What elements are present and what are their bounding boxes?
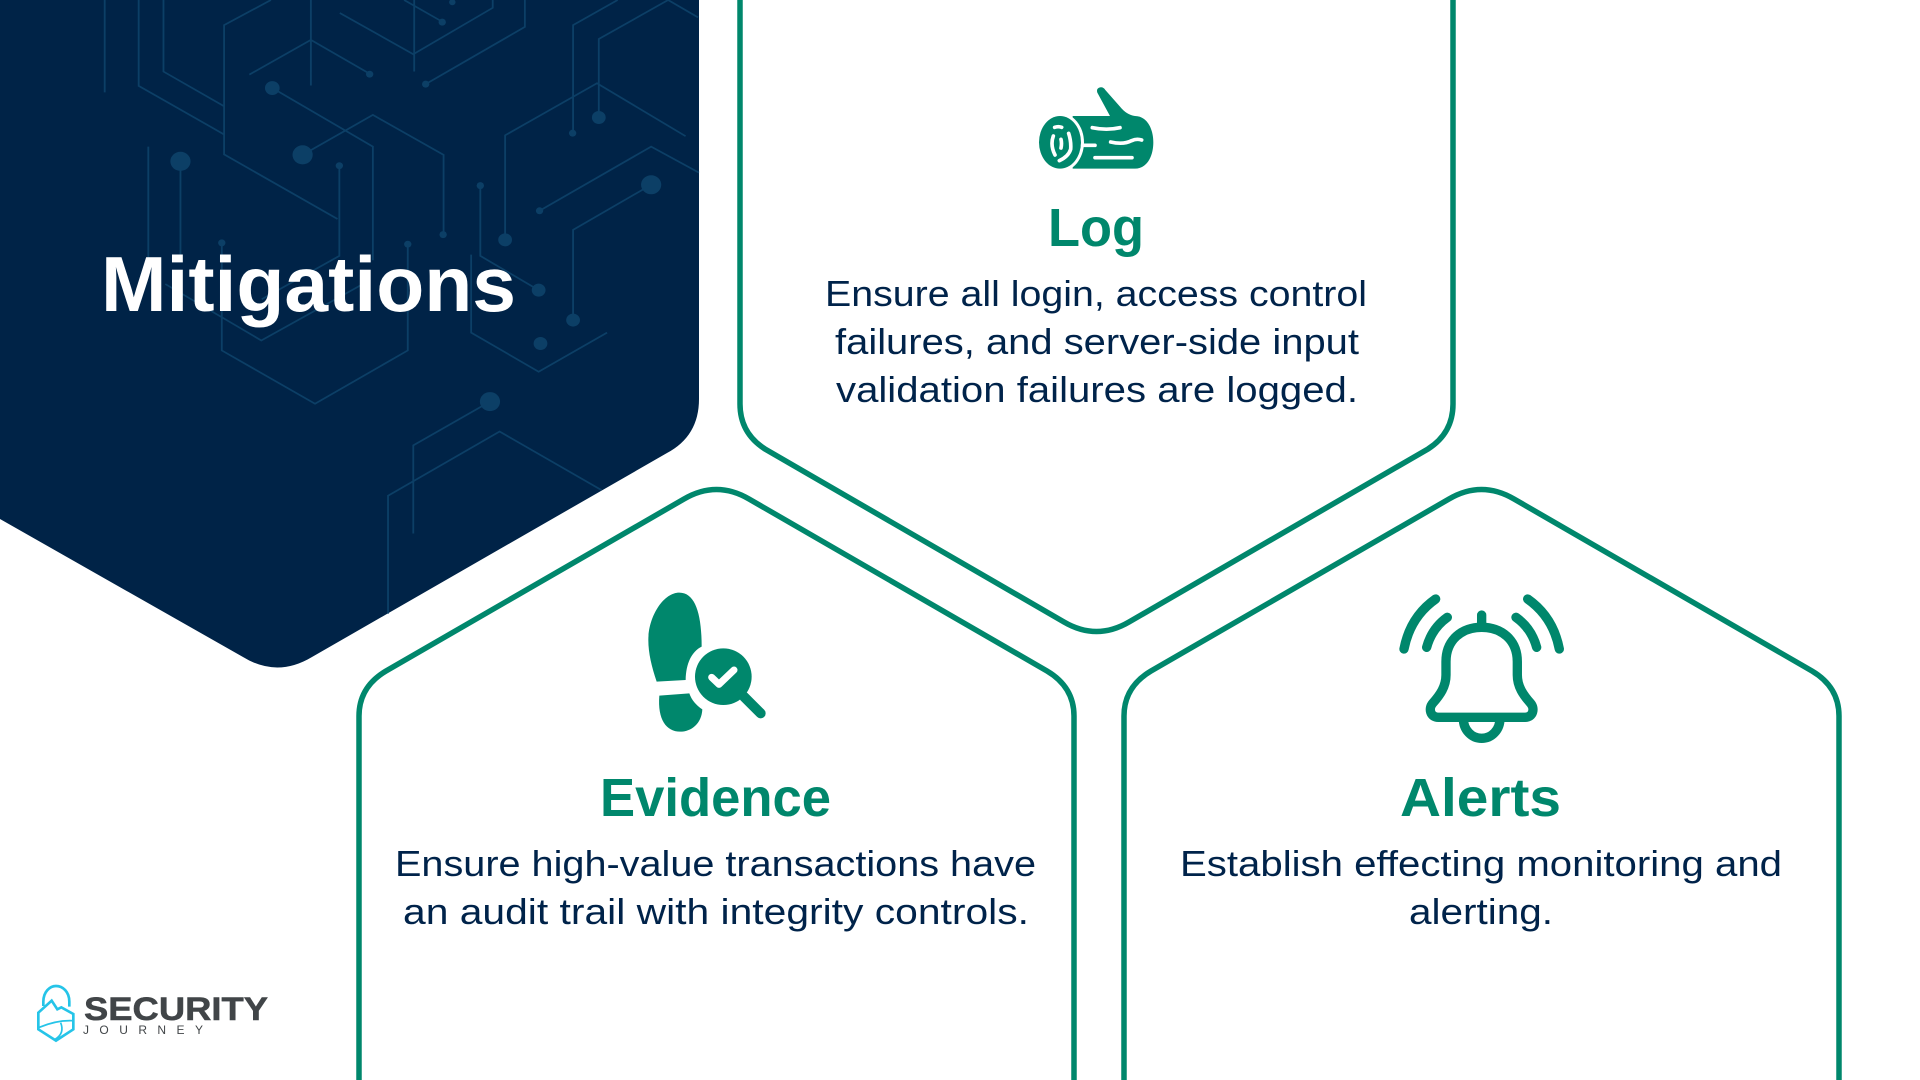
text: alerts description: Establish effecting monitoring and [1180,843,1782,884]
logo: Security Journey [38,986,268,1041]
icon: log [1036,87,1153,172]
heading: log: Log [1048,198,1144,258]
text: log description [825,273,1367,410]
panel: evidence [359,490,1074,1080]
text: log description: validation failures are logged. [836,369,1358,410]
heading: alerts: Alerts [1400,768,1561,828]
panel: log [740,0,1453,632]
icon: bell [1404,599,1559,738]
icon: padlock with mountains [38,986,73,1041]
text: log description: Ensure all login, access control [825,273,1367,314]
text: log description: failures, and server-side input [835,321,1359,362]
panel: title hexagon [0,0,699,667]
text: evidence description: an audit trail with integrity controls. [403,891,1029,932]
alerts hexagon outline [1124,490,1839,1080]
title: Mitigations [101,240,516,328]
log hexagon outline [740,0,1453,632]
text: alerts description [1180,843,1782,932]
text: evidence description: Ensure high-value transactions have [395,843,1036,884]
icon: footprint with magnifier [648,593,761,732]
circuit pattern [105,0,699,614]
panel: alerts [1124,490,1839,1080]
text: alerts description: alerting. [1409,891,1553,932]
logo sub-wordmark: JOURNEY [83,1023,203,1037]
heading: evidence: Evidence [600,768,831,828]
text: evidence description [395,843,1036,932]
evidence hexagon outline [359,490,1074,1080]
logo wordmark: SECURITY [84,991,268,1027]
dark hexagon background [0,0,699,668]
